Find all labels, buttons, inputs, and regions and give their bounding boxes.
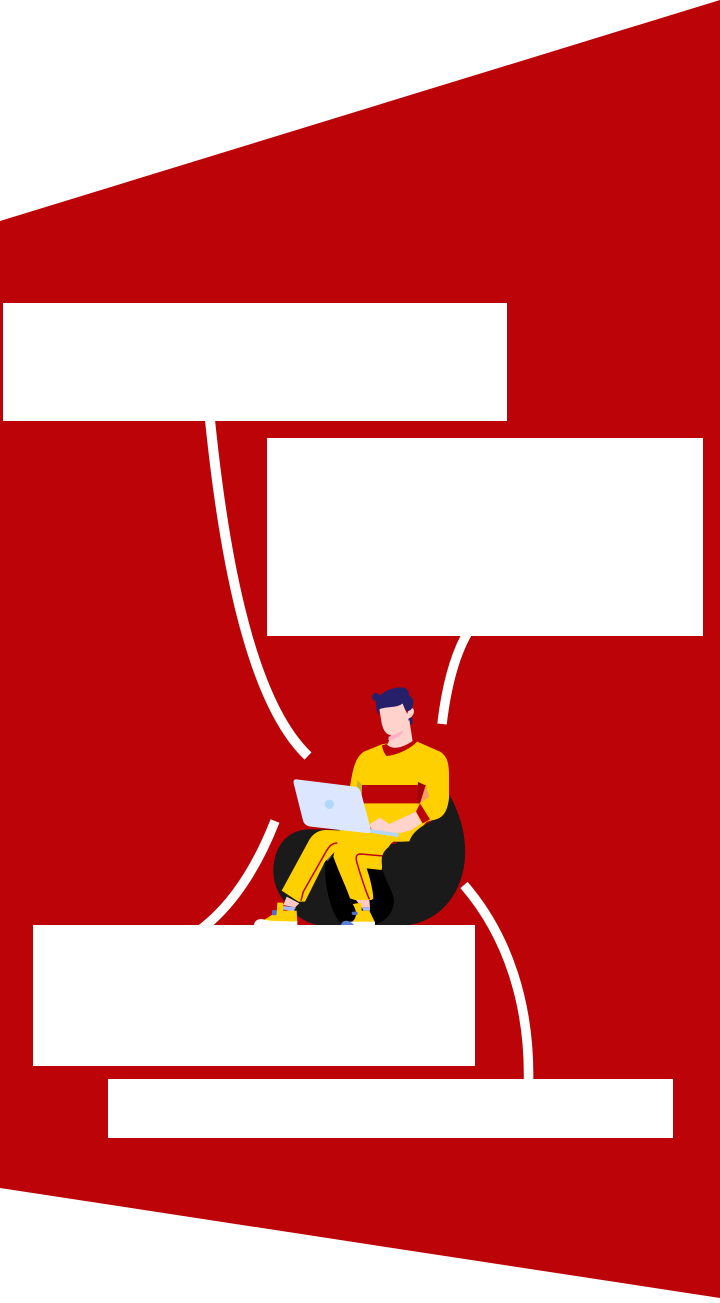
face — [379, 703, 414, 735]
shirt shadow right — [417, 782, 426, 803]
shoe left — [260, 903, 297, 922]
forearm — [370, 812, 421, 834]
ankle left — [283, 897, 299, 907]
connector: bottom-right box to figure — [464, 885, 529, 1082]
skin gap under sleeve — [420, 785, 429, 803]
trouser stripes — [301, 843, 384, 901]
sole left — [254, 919, 297, 926]
leg: right leg — [333, 830, 412, 900]
shoe lace right — [352, 912, 358, 915]
hair bun — [372, 693, 380, 701]
shirt shadow left — [357, 780, 362, 793]
laptop base — [370, 829, 399, 837]
sock left — [283, 906, 296, 911]
blue seat detail — [325, 855, 332, 862]
neck — [387, 720, 413, 749]
connector: top-right box to figure — [442, 632, 468, 724]
sole right — [350, 922, 375, 926]
hair — [372, 687, 413, 715]
shirt stripe — [362, 785, 426, 803]
hair behind neck — [408, 718, 412, 724]
connector: bottom-left box to figure — [200, 821, 275, 930]
text panel: top left — [3, 303, 507, 421]
toe cap right — [341, 921, 355, 926]
torso — [350, 741, 449, 842]
neck shadow — [388, 730, 404, 740]
waistband and pocket line — [384, 836, 397, 843]
beanbag front — [377, 795, 465, 926]
laptop logo — [325, 800, 334, 809]
arm sleeve cuff — [416, 803, 430, 823]
illustration: person on beanbag with laptop — [254, 687, 465, 926]
hair top — [376, 687, 413, 715]
text panel: top right — [267, 438, 703, 636]
text panel: bottom wide — [108, 1079, 673, 1138]
shoe lace left — [272, 910, 277, 915]
connector: top-left box to figure — [210, 415, 308, 756]
shirt collar — [382, 740, 417, 756]
leg: left leg — [282, 830, 360, 902]
sock right — [362, 907, 370, 911]
shoe right — [352, 903, 375, 922]
ankle right — [356, 900, 370, 907]
beanbag inner shadow — [325, 857, 395, 926]
laptop screen — [294, 779, 371, 833]
beanbag back — [273, 795, 465, 926]
text panel: bottom left — [33, 925, 475, 1066]
